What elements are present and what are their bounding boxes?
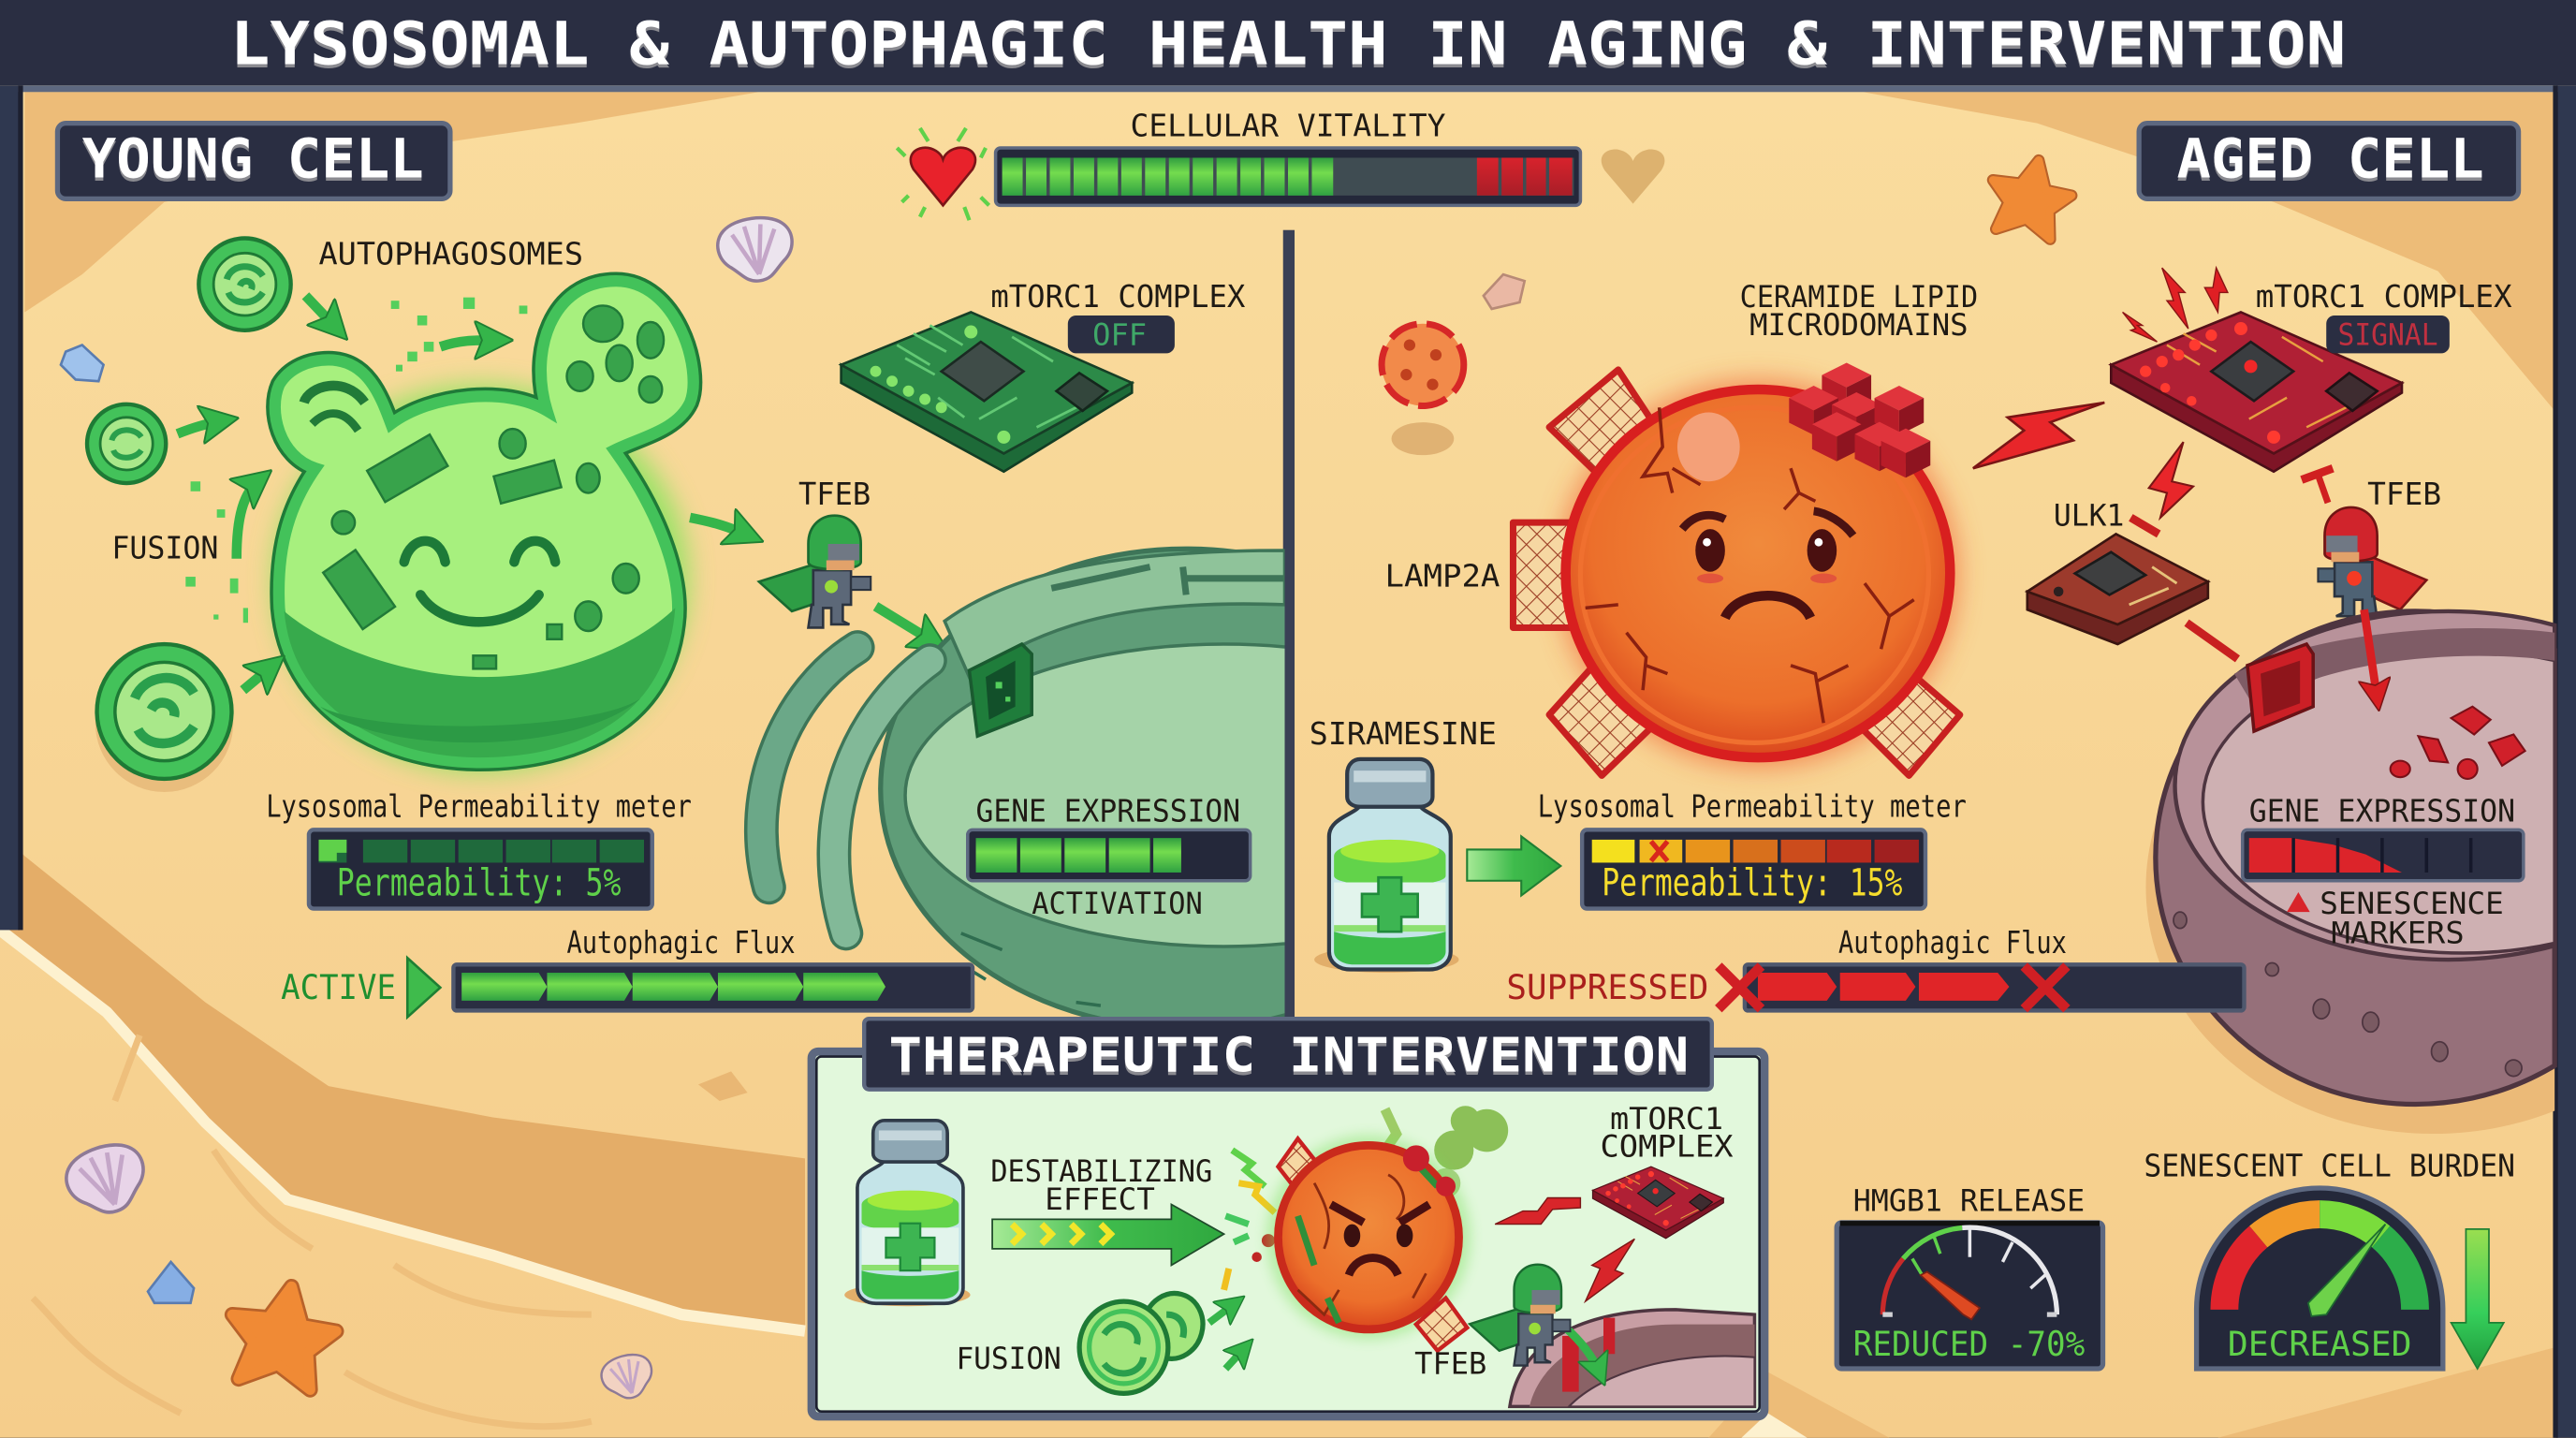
icon: red heart [897, 128, 989, 220]
lamp2a nets [1513, 370, 1960, 775]
flux bar [453, 964, 973, 1010]
mTORC1 label: mTORC1 COMPLEX [2256, 278, 2512, 315]
activation label: ACTIVATION [1032, 886, 1203, 921]
ULK1 label: ULK1 [2054, 498, 2124, 534]
flux label: Autophagic Flux [567, 924, 795, 961]
aged lysosome [1382, 324, 1960, 775]
sad face [1682, 511, 1853, 618]
faded cell [1382, 324, 1464, 455]
autophagosome top [198, 238, 291, 330]
mTORC1 label [1600, 1101, 1734, 1165]
gauge box [1837, 1221, 2103, 1369]
nuclear gate [970, 644, 1032, 736]
senescent cell burden [2144, 1148, 2515, 1369]
siramesine label: SIRAMESINE [1310, 715, 1497, 752]
gene bar [968, 829, 1251, 881]
gene bar [2243, 829, 2524, 881]
LAMP2A label: LAMP2A [1385, 558, 1500, 594]
meter box [309, 829, 652, 909]
fusion label: FUSION [111, 530, 218, 566]
envelope ribs [761, 648, 929, 933]
nucleus aged [2145, 611, 2554, 1134]
mTORC1 complex signal [2111, 268, 2512, 472]
fusion blob [1079, 1286, 1210, 1393]
HMGB1 release [1837, 1183, 2103, 1369]
mTORC1 complex off [842, 278, 1245, 472]
autophagosome middle [87, 404, 166, 483]
bottle [1314, 759, 1459, 973]
TFEB label: TFEB [2367, 476, 2441, 512]
angry face [1331, 1205, 1429, 1223]
lysosome body [1566, 389, 1950, 757]
badge: aged cell: AGED CELL [2177, 127, 2484, 191]
dome gauge [2197, 1188, 2443, 1369]
nucleus young [743, 547, 1284, 1017]
autophagic flux young [281, 924, 973, 1017]
siramesine [1310, 715, 1560, 973]
bolts [1495, 1198, 1634, 1301]
flux label: Autophagic Flux [1838, 924, 2067, 961]
bottle [844, 1121, 971, 1306]
destabilizing label: DESTABILIZING [990, 1153, 1212, 1189]
flux bar [1719, 964, 2244, 1010]
glow [274, 385, 688, 772]
autophagosome large [95, 644, 233, 792]
off badge: OFF [1092, 317, 1147, 353]
fusion label: FUSION [956, 1341, 1061, 1376]
mTORC1 label: mTORC1 [1610, 1101, 1723, 1137]
hero [1470, 1265, 1571, 1366]
highlight [1677, 413, 1740, 481]
angry cell [1266, 1136, 1471, 1351]
panel: therapeutic intervention [812, 1019, 1764, 1416]
icon: faded heart [1602, 149, 1664, 204]
decorative shells and starfish [59, 152, 2077, 1404]
meter box: Permeability: 15% [1602, 861, 1902, 905]
destabilizing label [990, 1153, 1212, 1217]
arrow [1467, 836, 1560, 896]
meter box: Permeability: 5% [337, 861, 621, 905]
burden label: SENESCENT CELL BURDEN [2144, 1148, 2515, 1184]
meter label: Lysosomal Permeability meter [1538, 787, 1967, 824]
gene expression aged [2243, 793, 2524, 950]
lysosome face [404, 541, 555, 622]
active arrowhead [407, 958, 440, 1017]
gene expression young [968, 793, 1251, 921]
bolt ULK1 [2130, 442, 2193, 534]
inhibit bar TFEB [2302, 468, 2333, 503]
badge: young cell: YOUNG CELL [82, 127, 424, 191]
dome gauge: DECREASED [2228, 1324, 2411, 1364]
suppressed label: SUPPRESSED [1506, 967, 1708, 1007]
senescence label: MARKERS [2331, 915, 2465, 950]
autophagosomes label: AUTOPHAGOSOMES [318, 236, 583, 272]
permeability young [266, 787, 692, 909]
young cell arrows [178, 296, 1068, 764]
lysosome contents [304, 305, 664, 668]
ceramide blocks [1789, 362, 1930, 477]
ceramide label: MICRODOMAINS [1749, 307, 1969, 343]
title: LYSOSOMAL & AUTOPHAGIC HEALTH IN AGING & INTERVENTION [230, 8, 2346, 78]
meter box [1582, 829, 1925, 909]
young lysosome [87, 238, 694, 792]
signal badge: SIGNAL [2338, 317, 2438, 353]
bolt to mTORC1 [1973, 403, 2104, 468]
senescence markers particles [2391, 707, 2525, 779]
mTORC1 label: mTORC1 COMPLEX [990, 278, 1245, 315]
mini chip [1592, 1167, 1723, 1239]
ULK1 chip [2027, 534, 2208, 644]
down arrow [2452, 1229, 2504, 1369]
vitality bar [996, 148, 1580, 205]
lysosome body [275, 281, 694, 762]
ceramide label: CERAMIDE LIPID [1740, 279, 1978, 315]
senescence label: SENESCENCE [2320, 886, 2504, 921]
senescence label [2320, 886, 2504, 950]
triangle [2287, 892, 2310, 912]
fusion arrows [1209, 1303, 1245, 1369]
TFEB young [759, 476, 871, 627]
cellular vitality [897, 108, 1664, 220]
destabilizing label: EFFECT [1045, 1181, 1155, 1217]
mini pot [1510, 1310, 1754, 1406]
destabilizing arrow [992, 1205, 1224, 1265]
divider [1283, 230, 1295, 1022]
TFEB label: TFEB [1414, 1345, 1486, 1381]
off badge [1068, 315, 1175, 353]
vitality label: CELLULAR VITALITY [1131, 108, 1445, 144]
HMGB1 label: HMGB1 RELEASE [1853, 1183, 2085, 1219]
cracks [1586, 407, 1914, 723]
autophagic flux aged [1506, 924, 2244, 1010]
panel title: THERAPEUTIC INTERVENTION [889, 1028, 1689, 1083]
TFEB aged [2318, 476, 2441, 620]
gene label: GENE EXPRESSION [976, 793, 1240, 829]
active label: ACTIVE [281, 967, 396, 1007]
gene label: GENE EXPRESSION [2249, 793, 2515, 829]
red arrow into nucleus [2364, 609, 2378, 698]
permeability aged [1538, 787, 1967, 909]
panel title [864, 1019, 1712, 1090]
badge: aged cell [2139, 124, 2519, 198]
dashed connector [2187, 623, 2237, 659]
gauge box: REDUCED -70% [1853, 1324, 2085, 1364]
meter label: Lysosomal Permeability meter [266, 787, 692, 824]
fusion particles [185, 298, 527, 623]
signal bolts [2123, 268, 2228, 342]
nucleus gate and arrow [1562, 1318, 1615, 1392]
nucleus gate [2247, 644, 2313, 731]
green smoke [1385, 1106, 1508, 1216]
particles [1224, 1151, 1275, 1290]
ceramide label [1740, 279, 1978, 343]
mTORC1 label: COMPLEX [1600, 1129, 1734, 1165]
TFEB label: TFEB [798, 476, 871, 512]
